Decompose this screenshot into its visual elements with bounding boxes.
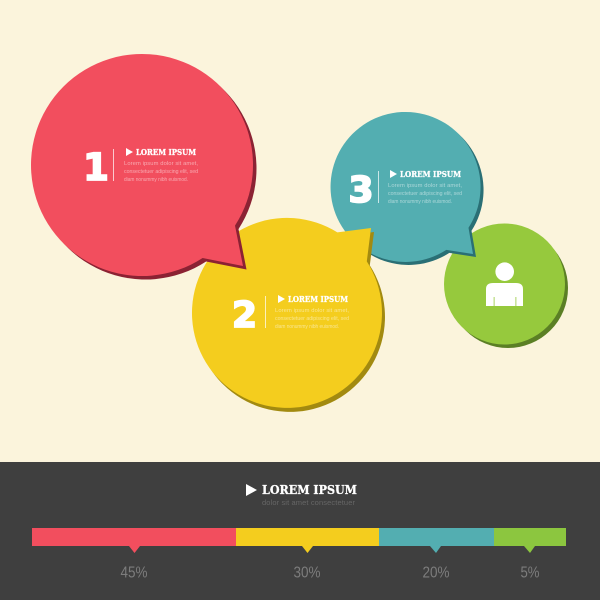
number 1: 1	[83, 146, 109, 189]
text block 3: diam nonummy nibh euismod.	[388, 199, 452, 205]
panel: dark footer	[0, 462, 600, 600]
icon: person	[486, 262, 523, 306]
text block 1: Lorem ipsum dolor sit amet,	[124, 161, 198, 167]
percentage labels: 5%	[520, 564, 540, 582]
panel: teal speech bubble 3	[331, 112, 484, 265]
text block 1	[124, 161, 198, 183]
text block 2: Lorem ipsum dolor sit amet,	[275, 308, 349, 314]
percentage labels: 30%	[294, 564, 320, 582]
text block 2: diam nonummy nibh euismod.	[275, 324, 339, 330]
heading 1: LOREM IPSUM	[136, 147, 196, 157]
number 2: 2	[232, 295, 257, 336]
text block 3: consectetuer adipiscing elit, sed	[388, 191, 462, 197]
number 3: 3	[348, 170, 374, 211]
text block 2: consectetuer adipiscing elit, sed	[275, 316, 349, 322]
icon: play	[278, 295, 285, 303]
percentage labels: 45%	[120, 564, 148, 582]
text block 1: diam nonummy nibh euismod.	[124, 177, 188, 183]
text block 2	[275, 308, 349, 330]
footer subtitle: dolor sit amet consectetuer	[262, 498, 356, 507]
percentage labels: 20%	[422, 564, 450, 582]
panel: yellow speech bubble 2	[192, 218, 385, 412]
text block 3	[388, 183, 462, 205]
icon: play	[390, 170, 397, 178]
panel: red speech bubble 1	[31, 54, 257, 280]
icon: play	[246, 484, 257, 496]
heading 3: LOREM IPSUM	[400, 169, 461, 179]
panel: green person bubble	[444, 224, 568, 348]
bar chart	[32, 528, 566, 553]
footer heading: LOREM IPSUM	[262, 483, 357, 497]
text block 1: consectetuer adipiscing elit, sed	[124, 169, 198, 175]
heading 2: LOREM IPSUM	[288, 294, 348, 304]
text block 3: Lorem ipsum dolor sit amet,	[388, 183, 462, 189]
icon: play	[126, 148, 133, 156]
percentage labels	[120, 564, 540, 582]
